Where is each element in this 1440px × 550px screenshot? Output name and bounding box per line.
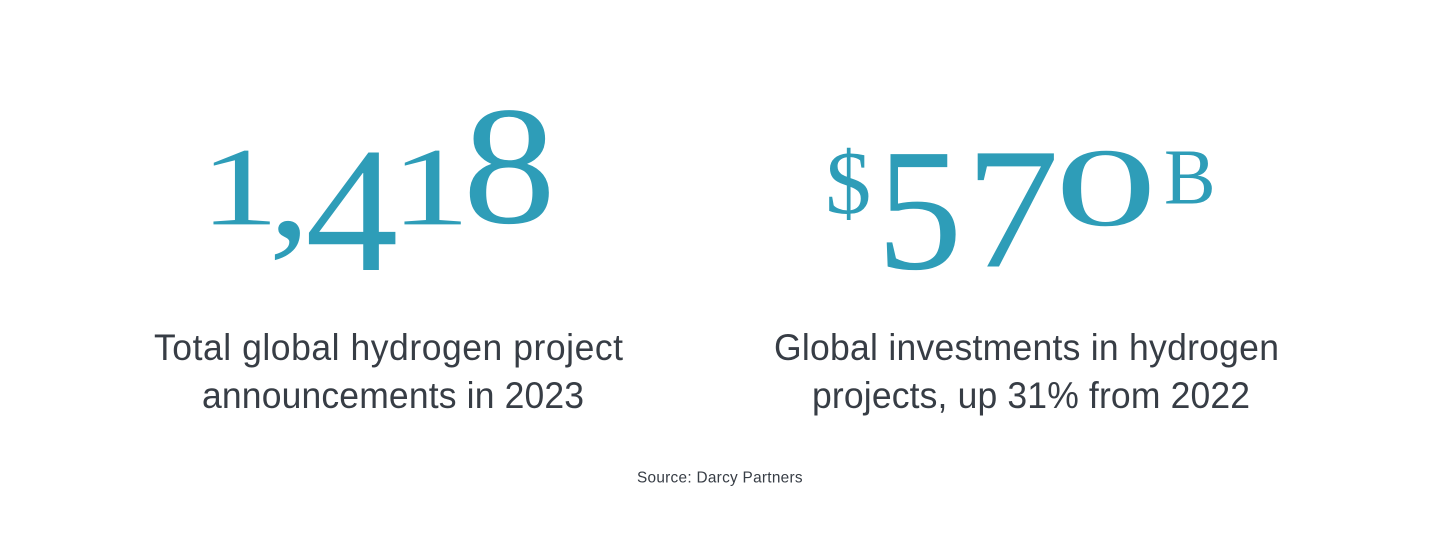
panel: project announcements: [154, 72, 623, 416]
description: total announcements: [154, 326, 623, 416]
description: global investments: [774, 326, 1279, 416]
big number: $570B: 0: [1055, 125, 1157, 250]
big number: 1,418: 4: [305, 112, 398, 309]
description: total announcements: Total global hydrogen project: [154, 326, 623, 368]
big number: 1,418: 1: [390, 125, 470, 249]
big number: 1,418: [199, 72, 556, 309]
big number: $570B: 5: [877, 114, 962, 307]
big number: 1,418: 8: [463, 72, 556, 260]
panel: global investments: [774, 113, 1279, 416]
big number: 1,418: 1: [199, 125, 279, 249]
description: global investments: projects, up 31% from 2022: [812, 374, 1250, 416]
big number: $570B: [825, 113, 1216, 307]
big number: $570B: B: [1164, 133, 1216, 221]
big number: $570B: $: [825, 133, 871, 233]
big number: 1,418: ,: [268, 100, 311, 270]
description: global investments: Global investments in hydrogen: [774, 326, 1279, 368]
source note: Source: Darcy Partners: [637, 469, 803, 487]
description: total announcements: announcements in 2023: [202, 374, 584, 416]
big number: $570B: 7: [965, 113, 1059, 305]
